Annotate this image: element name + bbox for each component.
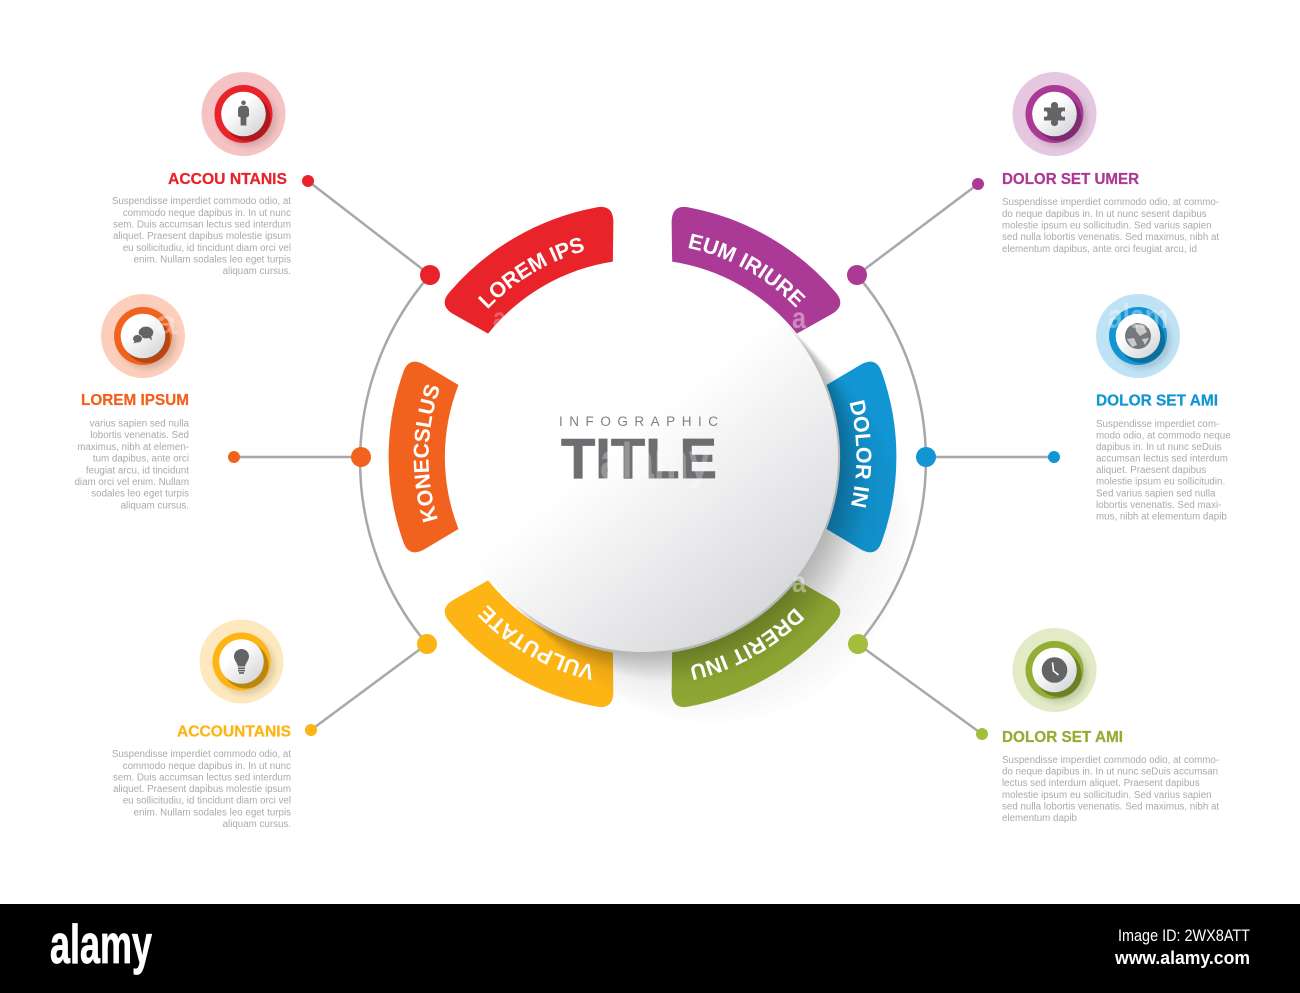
panel: accou ntanis	[112, 72, 291, 277]
centre disc	[448, 262, 838, 652]
band labels: EUM IRIURE	[688, 234, 806, 308]
heading: LOREM IPSUM	[81, 392, 189, 409]
body text: diam orci vel enim. Nullam	[74, 477, 189, 488]
body text: sem. Duis accumsan lectus sed interdum	[113, 772, 291, 783]
footer bar	[0, 904, 1300, 993]
heading: ACCOU NTANIS	[168, 171, 287, 188]
icon: speech bubbles: a	[155, 304, 178, 342]
body text: commodo neque dapibus in. In ut nunc	[123, 208, 291, 219]
watermark marks: alamy	[600, 433, 710, 489]
body text: sem. Duis accumsan lectus sed interdum	[113, 220, 291, 230]
body text	[112, 196, 291, 277]
body text: Sed varius sapien sed nulla	[1096, 488, 1216, 499]
body text	[1002, 197, 1219, 255]
icon: light bulb	[200, 620, 284, 704]
body text	[1096, 419, 1231, 523]
body text: dapibus in. In ut nunc seDuis	[1096, 442, 1222, 453]
body text	[1002, 755, 1219, 824]
body text: Suspendisse imperdiet commodo odio, at	[112, 749, 291, 760]
body text: enim. Nullam sodales leo eget turpis	[134, 807, 291, 818]
body text	[74, 418, 190, 511]
body text: lobortis venenatis. Sed maxi-	[1096, 500, 1221, 511]
body text: aliquet. Praesent dapibus molestie ipsum	[113, 231, 291, 242]
heading: ACCOUNTANIS	[177, 724, 291, 740]
watermark marks: a	[792, 302, 806, 335]
connector arcs and lines	[234, 181, 1054, 734]
body text: varius sapien sed nulla	[90, 418, 190, 430]
body text: Suspendisse imperdiet commodo odio, at commo-	[1002, 197, 1219, 208]
body text: maximus, nibh at elemen-	[77, 442, 189, 453]
body text: Suspendisse imperdiet commodo odio, at	[112, 196, 291, 207]
body text	[112, 749, 291, 830]
body text: aliquam cursus.	[223, 266, 291, 277]
panel: dolor set ami (blue)	[1096, 294, 1231, 523]
body text: do neque dapibus in. In ut nunc seDuis accumsan	[1002, 766, 1218, 777]
long shadow of centre disc	[450, 264, 908, 722]
body text: Suspendisse imperdiet com-	[1096, 419, 1219, 430]
connector dots	[228, 175, 1060, 740]
watermark marks	[493, 302, 806, 599]
panel: dolor set ami (green)	[1002, 628, 1219, 824]
heading: DOLOR SET AMI	[1002, 729, 1123, 746]
body text: sed nulla lobortis venenatis. Sed maximus, nibh at	[1002, 232, 1219, 243]
image id: Image ID: 2WX8ATT	[1118, 926, 1250, 945]
icon: puzzle piece	[1012, 72, 1096, 156]
body text: eu sollicitudiu, id tincidunt diam orci vel	[123, 796, 291, 807]
body text: sodales leo eget turpis	[91, 489, 189, 500]
body text: accumsan lectus sed interdum	[1096, 454, 1228, 464]
body text: elementum dapibus, ante orci feugiat arcu, id	[1002, 244, 1197, 255]
body text: lobortis venenatis. Sed	[90, 430, 189, 441]
body text: molestie ipsum eu sollicitudin. Sed varius sapien	[1002, 220, 1212, 232]
band labels: LOREM IPS	[478, 238, 584, 309]
icon: clock	[1012, 628, 1096, 712]
title main: TITLE	[561, 427, 717, 491]
panel: lorem ipsum	[74, 294, 190, 511]
icon: globe: alam	[1108, 298, 1168, 336]
heading: DOLOR SET AMI	[1096, 392, 1218, 410]
band labels: KONECSLUS	[414, 384, 439, 522]
body text: molestie ipsum eu sollicitudin.	[1096, 477, 1225, 488]
icon: speech bubbles	[101, 294, 185, 378]
site url: www.alamy.com	[1114, 948, 1250, 968]
body text: commodo neque dapibus in. In ut nunc	[123, 761, 291, 772]
band labels: VULPUTATE	[478, 605, 592, 680]
band labels: DOLOR IN	[850, 400, 872, 508]
icon: person	[202, 72, 286, 156]
title	[559, 414, 718, 491]
body text: feugiat arcu, id tincidunt	[86, 465, 189, 476]
ring of six coloured bands	[389, 190, 896, 724]
footer logo: alamy	[50, 913, 152, 975]
icon: globe	[1096, 294, 1180, 378]
watermark marks: a	[493, 302, 506, 335]
watermark marks: a	[792, 566, 806, 599]
panel: accountanis	[112, 620, 291, 830]
body text: elementum dapib	[1002, 813, 1077, 824]
panel: dolor set umer	[1002, 72, 1219, 255]
body text: enim. Nullam sodales leo eget turpis	[134, 254, 291, 266]
body text: eu sollicitudiu, id tincidunt diam orci vel	[123, 243, 291, 254]
body text: aliquam cursus.	[121, 500, 189, 511]
body text: mus, nibh at elementum dapib	[1096, 512, 1227, 523]
body text: lectus sed interdum aliquet. Praesent dapibus	[1002, 778, 1200, 789]
body text: aliquam cursus.	[223, 819, 291, 830]
body text: do neque dapibus in. In ut nunc sesent dapibus	[1002, 209, 1207, 220]
band labels	[368, 226, 916, 686]
band labels: DRERIT INU	[691, 608, 804, 680]
heading: DOLOR SET UMER	[1002, 171, 1139, 188]
body text: modo odio, at commodo neque	[1096, 430, 1231, 442]
body text: Suspendisse imperdiet commodo odio, at commo-	[1002, 755, 1219, 766]
body text: aliquet. Praesent dapibus	[1096, 465, 1206, 476]
body text: aliquet. Praesent dapibus molestie ipsum	[113, 784, 291, 795]
body text: molestie ipsum eu sollicitudin. Sed varius sapien	[1002, 790, 1212, 801]
body text: tum dapibus, ante orci	[93, 454, 189, 465]
body text: sed nulla lobortis venenatis. Sed maximus, nibh at	[1002, 802, 1219, 812]
title kicker: INFOGRAPHIC	[559, 414, 718, 429]
